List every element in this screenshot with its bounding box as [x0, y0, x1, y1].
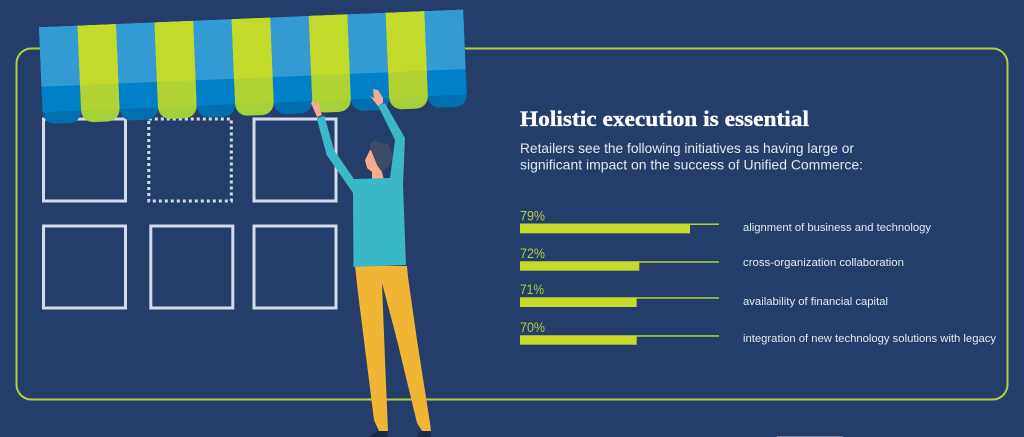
row 70%: integration of new technology solutions with legacy — [743, 333, 997, 345]
row 79%: alignment of business and technology — [743, 222, 931, 234]
row 70% — [520, 319, 997, 345]
sweater — [317, 103, 406, 267]
neck and face — [365, 150, 384, 180]
intro text — [520, 140, 863, 172]
window 2 dotted — [149, 119, 231, 201]
window grid — [44, 119, 336, 308]
window 3 — [254, 119, 336, 201]
row 79%: 79% — [520, 208, 545, 224]
row 71%: availability of financial capital — [743, 296, 888, 308]
intro text: significant impact on the success of Unified Commerce: — [520, 156, 863, 172]
row 71% — [520, 281, 888, 308]
bar chart — [520, 208, 997, 345]
row 72% — [520, 245, 904, 271]
row 72%: cross-organization collaboration — [743, 257, 904, 269]
person — [311, 89, 431, 437]
row 72%: 72% — [520, 245, 545, 261]
trousers — [355, 266, 431, 431]
window 1 — [44, 119, 126, 201]
window 5 — [151, 226, 233, 308]
shoes — [368, 431, 431, 437]
right hand — [370, 89, 383, 106]
awning — [39, 10, 467, 124]
row 70%: 70% — [520, 319, 545, 335]
intro text: Retailers see the following initiatives as having large or — [520, 140, 854, 156]
rounded outline panel — [16, 48, 1008, 400]
row 79% — [520, 208, 931, 234]
hair — [370, 140, 393, 172]
row 71%: 71% — [520, 281, 544, 297]
green stripes — [78, 11, 428, 123]
window 4 — [44, 226, 126, 308]
blue stripes — [39, 10, 467, 124]
left hand — [311, 100, 322, 117]
heading: Holistic execution is essential — [520, 106, 809, 131]
window 6 — [254, 226, 336, 308]
